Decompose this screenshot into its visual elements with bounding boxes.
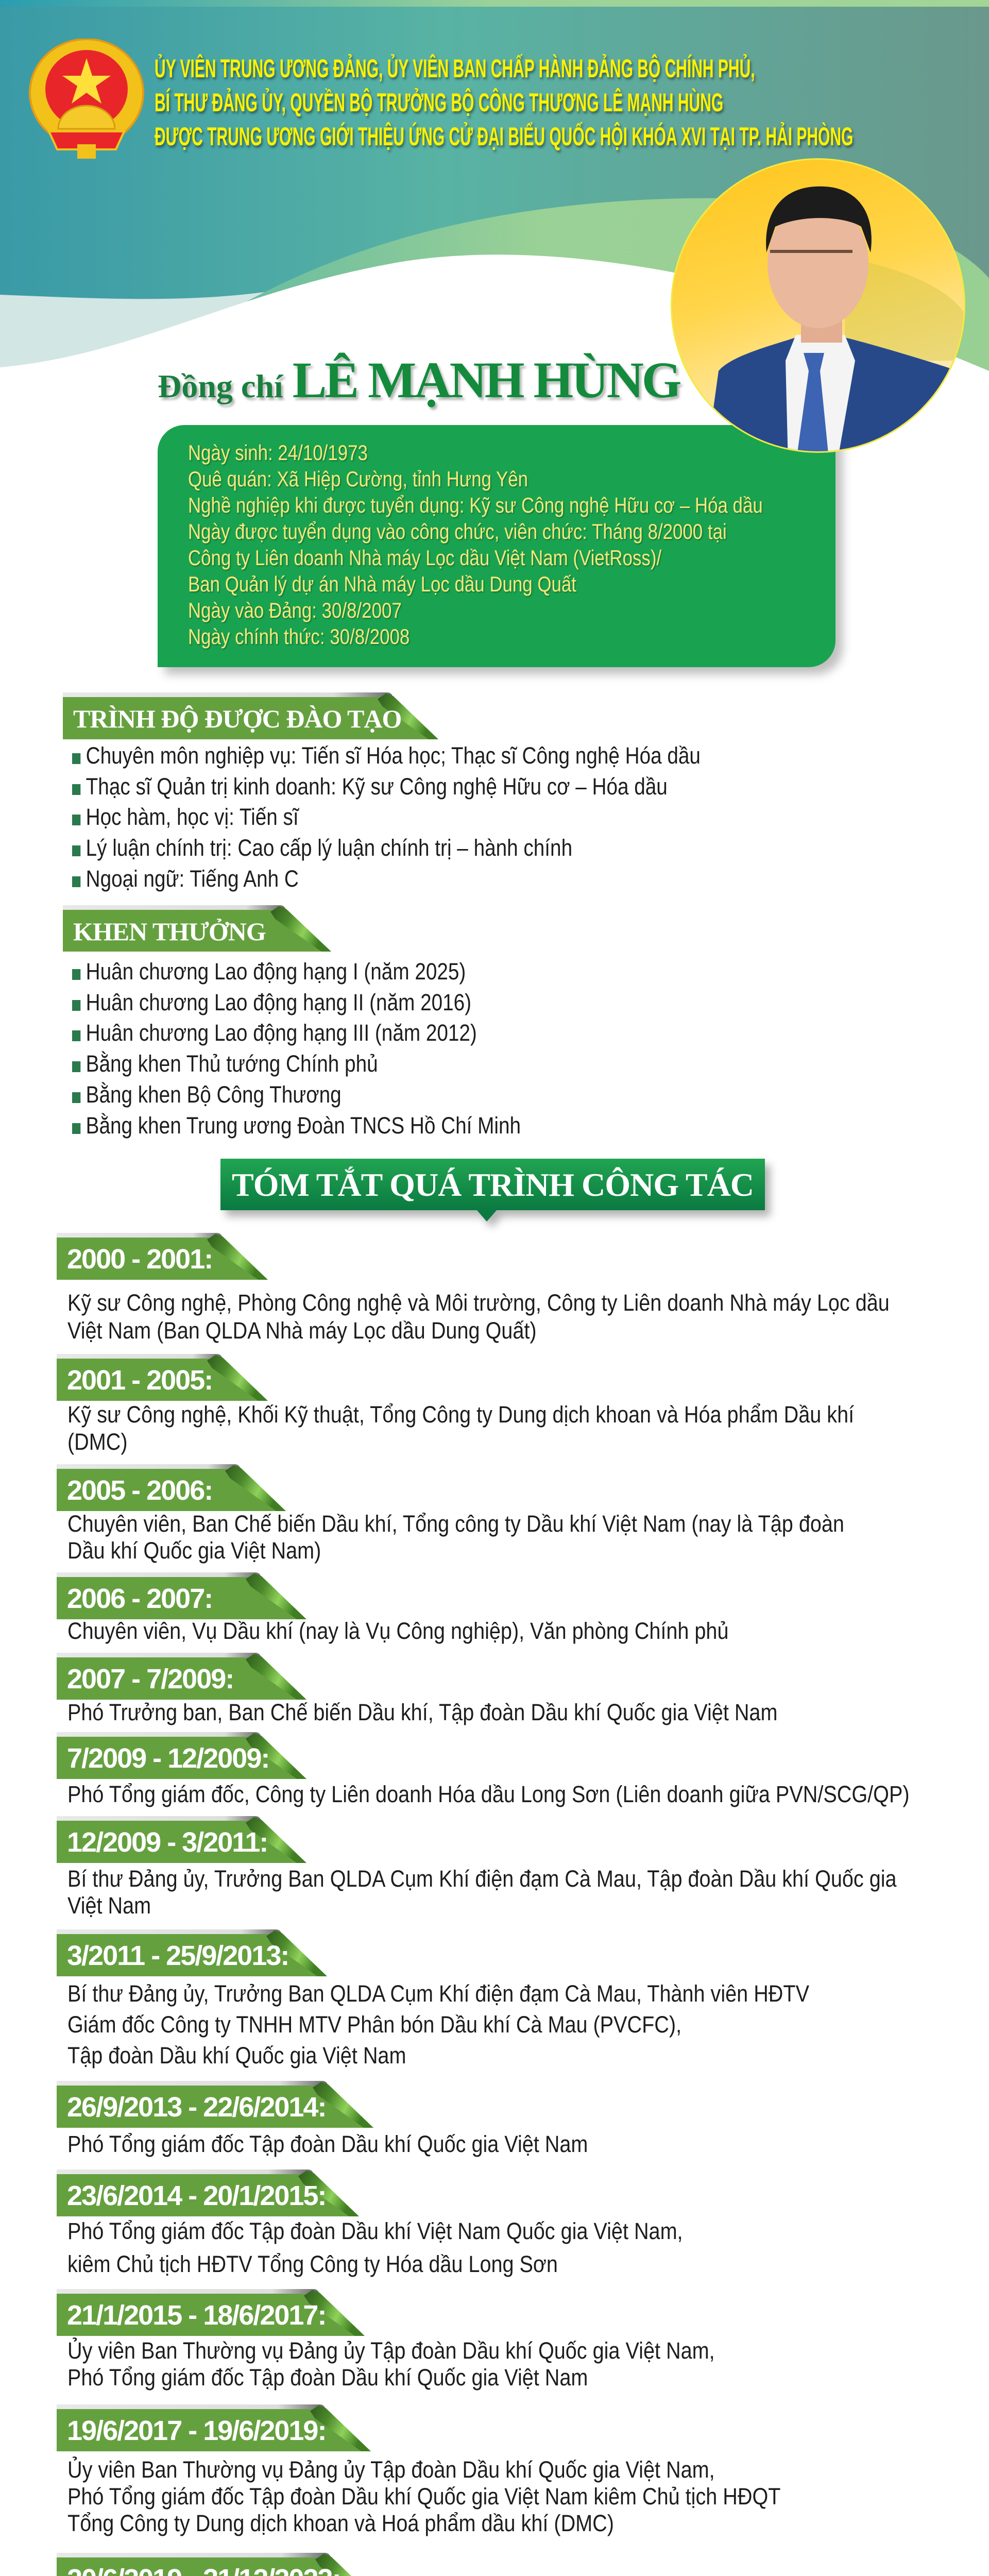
timeline entry: 3/2011-25/9/2013: 3/2011 - 25/9/2013: <box>67 1940 288 1971</box>
text: 2006-2007: Chuyên viên, Vụ Dầu khí (nay là Vụ Công nghiệp), Văn phòng Chính phủ <box>67 1618 728 1644</box>
text: 21/1/2015-18/6/2017 <box>67 2337 715 2391</box>
text: 23/6/2014-20/1/2015: Phó Tổng giám đốc Tập đoàn Dầu khí Việt Nam Quốc gia Việt Nam, <box>67 2218 683 2244</box>
heading: name: Đồng chíLÊ MẠNH HÙNG <box>158 351 680 409</box>
timeline entry: 26/9/2013-22/6/2014: 26/9/2013 - 22/6/2014: <box>67 2092 326 2123</box>
timeline entry: 19/6/2017-19/6/2019 <box>57 2404 371 2451</box>
text: 2005-2006: Chuyên viên, Ban Chế biến Dầu khí, Tổng công ty Dầu khí Việt Nam (nay là Tập đoàn <box>67 1511 844 1537</box>
title: BÍ THƯ ĐẢNG ỦY, QUYỀN BỘ TRƯỞNG BỘ CÔNG THƯƠNG LÊ MẠNH HÙNG <box>155 88 723 117</box>
timeline entry: 23/6/2014-20/1/2015 <box>57 2170 359 2216</box>
text: 3/2011-25/9/2013: Tập đoàn Dầu khí Quốc gia Việt Nam <box>67 2042 406 2069</box>
text block: personal details: Công ty Liên doanh Nhà máy Lọc dầu Việt Nam (VietRoss)/ <box>188 546 661 570</box>
list: training: Chuyên môn nghiệp vụ: Tiến sĩ Hóa học; Thạc sĩ Công nghệ Hóa dầu <box>86 742 701 769</box>
text: 19/6/2017-19/6/2019: Tổng Công ty Dung dịch khoan và Hoá phẩm dầu khí (DMC) <box>67 2510 614 2536</box>
section banner: training <box>63 692 438 739</box>
panel: profile info box <box>158 425 835 667</box>
timeline entry: 2005-2006 <box>57 1464 286 1511</box>
title <box>155 54 855 154</box>
text block: personal details: Ban Quản lý dự án Nhà máy Lọc dầu Dung Quất <box>188 572 576 596</box>
timeline entry: 2007-7/2009 <box>57 1653 306 1700</box>
section banner: awards: KHEN THƯỞNG <box>73 917 266 946</box>
timeline entry: 21/1/2015-18/6/2017 <box>57 2289 365 2336</box>
timeline entry: 23/6/2014-20/1/2015: 23/6/2014 - 20/1/2015: <box>67 2180 326 2211</box>
text: 7/2009-12/2009: Phó Tổng giám đốc, Công ty Liên doanh Hóa dầu Long Sơn (Liên doanh giữa PVN/SCG/QP) <box>67 1781 910 1807</box>
timeline entry: 20/6/2019-31/12/2023 <box>57 2553 376 2576</box>
text: 19/6/2017-19/6/2019 <box>67 2456 781 2537</box>
list: training: Ngoại ngữ: Tiếng Anh C <box>86 866 299 892</box>
list: training <box>72 742 701 892</box>
text: 19/6/2017-19/6/2019: Phó Tổng giám đốc Tập đoàn Dầu khí Quốc gia Việt Nam kiêm Chủ tịch HĐQT <box>67 2483 781 2510</box>
text: 12/2009-3/2011: Bí thư Đảng ủy, Trưởng Ban QLDA Cụm Khí điện đạm Cà Mau, Tập đoàn Dầu khí Quốc gia <box>67 1866 897 1892</box>
text: 19/6/2017-19/6/2019: Ủy viên Ban Thường vụ Đảng ủy Tập đoàn Dầu khí Quốc gia Việt Nam, <box>67 2456 715 2483</box>
timeline entry: 2001-2005: 2001 - 2005: <box>67 1365 212 1396</box>
timeline entry: 12/2009-3/2011 <box>57 1816 306 1863</box>
timeline entry: 2000-2001: 2000 - 2001: <box>67 1244 212 1275</box>
list: awards: Huân chương Lao động hạng I (năm 2025) <box>86 958 466 985</box>
text: 12/2009-3/2011: Việt Nam <box>67 1892 151 1919</box>
text: 2001-2005: (DMC) <box>67 1429 128 1455</box>
timeline entry: 7/2009-12/2009: 7/2009 - 12/2009: <box>67 1743 269 1774</box>
section banner: awards <box>63 905 331 952</box>
text block: personal details <box>188 440 763 650</box>
text block: personal details: Ngày vào Đảng: 30/8/2007 <box>188 598 402 622</box>
text block: personal details: Ngày chính thức: 30/8/2008 <box>188 624 410 649</box>
timeline entry: 7/2009-12/2009 <box>57 1732 306 1779</box>
timeline entry: 2001-2005 <box>57 1354 268 1401</box>
text block: personal details: Ngày sinh: 24/10/1973 <box>188 440 368 465</box>
text: 12/2009-3/2011 <box>67 1866 897 1919</box>
title: ỦY VIÊN TRUNG ƯƠNG ĐẢNG, ỦY VIÊN BAN CHẤP HÀNH ĐẢNG BỘ CHÍNH PHỦ, <box>155 54 755 83</box>
list: training: Học hàm, học vị: Tiến sĩ <box>86 804 299 830</box>
list: awards: Huân chương Lao động hạng II (năm 2016) <box>86 989 471 1015</box>
text: 2005-2006 <box>67 1511 844 1564</box>
list: awards: Bằng khen Trung ương Đoàn TNCS Hồ Chí Minh <box>86 1112 521 1139</box>
timeline entry: 21/1/2015-18/6/2017: 21/1/2015 - 18/6/2017: <box>67 2300 326 2331</box>
section banner: training: TRÌNH ĐỘ ĐƯỢC ĐÀO TẠO <box>73 704 401 733</box>
text: 23/6/2014-20/1/2015 <box>67 2215 683 2281</box>
text: 2005-2006: Dầu khí Quốc gia Việt Nam) <box>67 1537 321 1564</box>
list: training: Lý luận chính trị: Cao cấp lý luận chính trị – hành chính <box>86 835 572 861</box>
list: awards: Huân chương Lao động hạng III (năm 2012) <box>86 1020 477 1046</box>
text: 2007-7/2009: Phó Trưởng ban, Ban Chế biến Dầu khí, Tập đoàn Dầu khí Quốc gia Việt Nam <box>67 1699 777 1725</box>
text block: personal details: Nghề nghiệp khi được tuyển dụng: Kỹ sư Công nghệ Hữu cơ – Hóa dầu <box>188 493 763 517</box>
text: 2000-2001 <box>67 1289 890 1345</box>
text: 2001-2005: Kỹ sư Công nghệ, Khối Kỹ thuật, Tổng Công ty Dung dịch khoan và Hóa phẩm Dầu khí <box>67 1401 854 1428</box>
title: ĐƯỢC TRUNG ƯƠNG GIỚI THIỆU ỨNG CỬ ĐẠI BIỂU QUỐC HỘI KHÓA XVI TẠI TP. HẢI PHÒNG <box>155 122 853 151</box>
header background with waves <box>0 0 989 371</box>
text: 3/2011-25/9/2013: Giám đốc Công ty TNHH MTV Phân bón Dầu khí Cà Mau (PVCFC), <box>67 2011 681 2038</box>
text: 21/1/2015-18/6/2017: Phó Tổng giám đốc Tập đoàn Dầu khí Quốc gia Việt Nam <box>67 2364 588 2391</box>
text: 3/2011-25/9/2013: Bí thư Đảng ủy, Trưởng Ban QLDA Cụm Khí điện đạm Cà Mau, Thành viên HĐTV <box>67 1980 809 2007</box>
text: 2000-2001: Kỹ sư Công nghệ, Phòng Công nghệ và Môi trường, Công ty Liên doanh Nhà máy Lọc dầu <box>67 1290 890 1316</box>
list: awards: Bằng khen Bộ Công Thương <box>86 1081 342 1108</box>
heading: career summary: TÓM TẮT QUÁ TRÌNH CÔNG TÁC <box>232 1166 754 1203</box>
heading: career summary <box>220 1159 775 1230</box>
portrait photo <box>671 158 965 453</box>
text block: personal details: Ngày được tuyển dụng vào công chức, viên chức: Tháng 8/2000 tại <box>188 519 727 544</box>
list: training: Thạc sĩ Quản trị kinh doanh: Kỹ sư Công nghệ Hữu cơ – Hóa dầu <box>86 773 668 800</box>
timeline entry: 26/9/2013-22/6/2014 <box>57 2081 373 2128</box>
timeline entry: 2006-2007: 2006 - 2007: <box>67 1583 212 1614</box>
timeline entry: 12/2009-3/2011: 12/2009 - 3/2011: <box>67 1827 267 1858</box>
timeline entry: 3/2011-25/9/2013 <box>57 1929 327 1976</box>
timeline entry: 2007-7/2009: 2007 - 7/2009: <box>67 1664 233 1694</box>
text block: personal details: Quê quán: Xã Hiệp Cường, tỉnh Hưng Yên <box>188 467 528 491</box>
timeline entry: 2005-2006: 2005 - 2006: <box>67 1475 212 1506</box>
list: awards: Bằng khen Thủ tướng Chính phủ <box>86 1050 378 1077</box>
timeline entry: 2000-2001 <box>57 1233 268 1280</box>
list: awards <box>72 958 521 1139</box>
text: 2000-2001: Việt Nam (Ban QLDA Nhà máy Lọc dầu Dung Quất) <box>67 1317 537 1344</box>
icon: national emblem <box>29 39 144 159</box>
text: 21/1/2015-18/6/2017: Ủy viên Ban Thường vụ Đảng ủy Tập đoàn Dầu khí Quốc gia Việt Nam, <box>67 2337 715 2364</box>
timeline entry: 19/6/2017-19/6/2019: 19/6/2017 - 19/6/2019: <box>67 2415 326 2446</box>
text: 26/9/2013-22/6/2014: Phó Tổng giám đốc Tập đoàn Dầu khí Quốc gia Việt Nam <box>67 2131 588 2157</box>
timeline entry: 2006-2007 <box>57 1572 306 1619</box>
text: 3/2011-25/9/2013 <box>67 1978 809 2071</box>
text: 2001-2005 <box>67 1401 854 1455</box>
text: 23/6/2014-20/1/2015: kiêm Chủ tịch HĐTV Tổng Công ty Hóa dầu Long Sơn <box>67 2251 558 2277</box>
